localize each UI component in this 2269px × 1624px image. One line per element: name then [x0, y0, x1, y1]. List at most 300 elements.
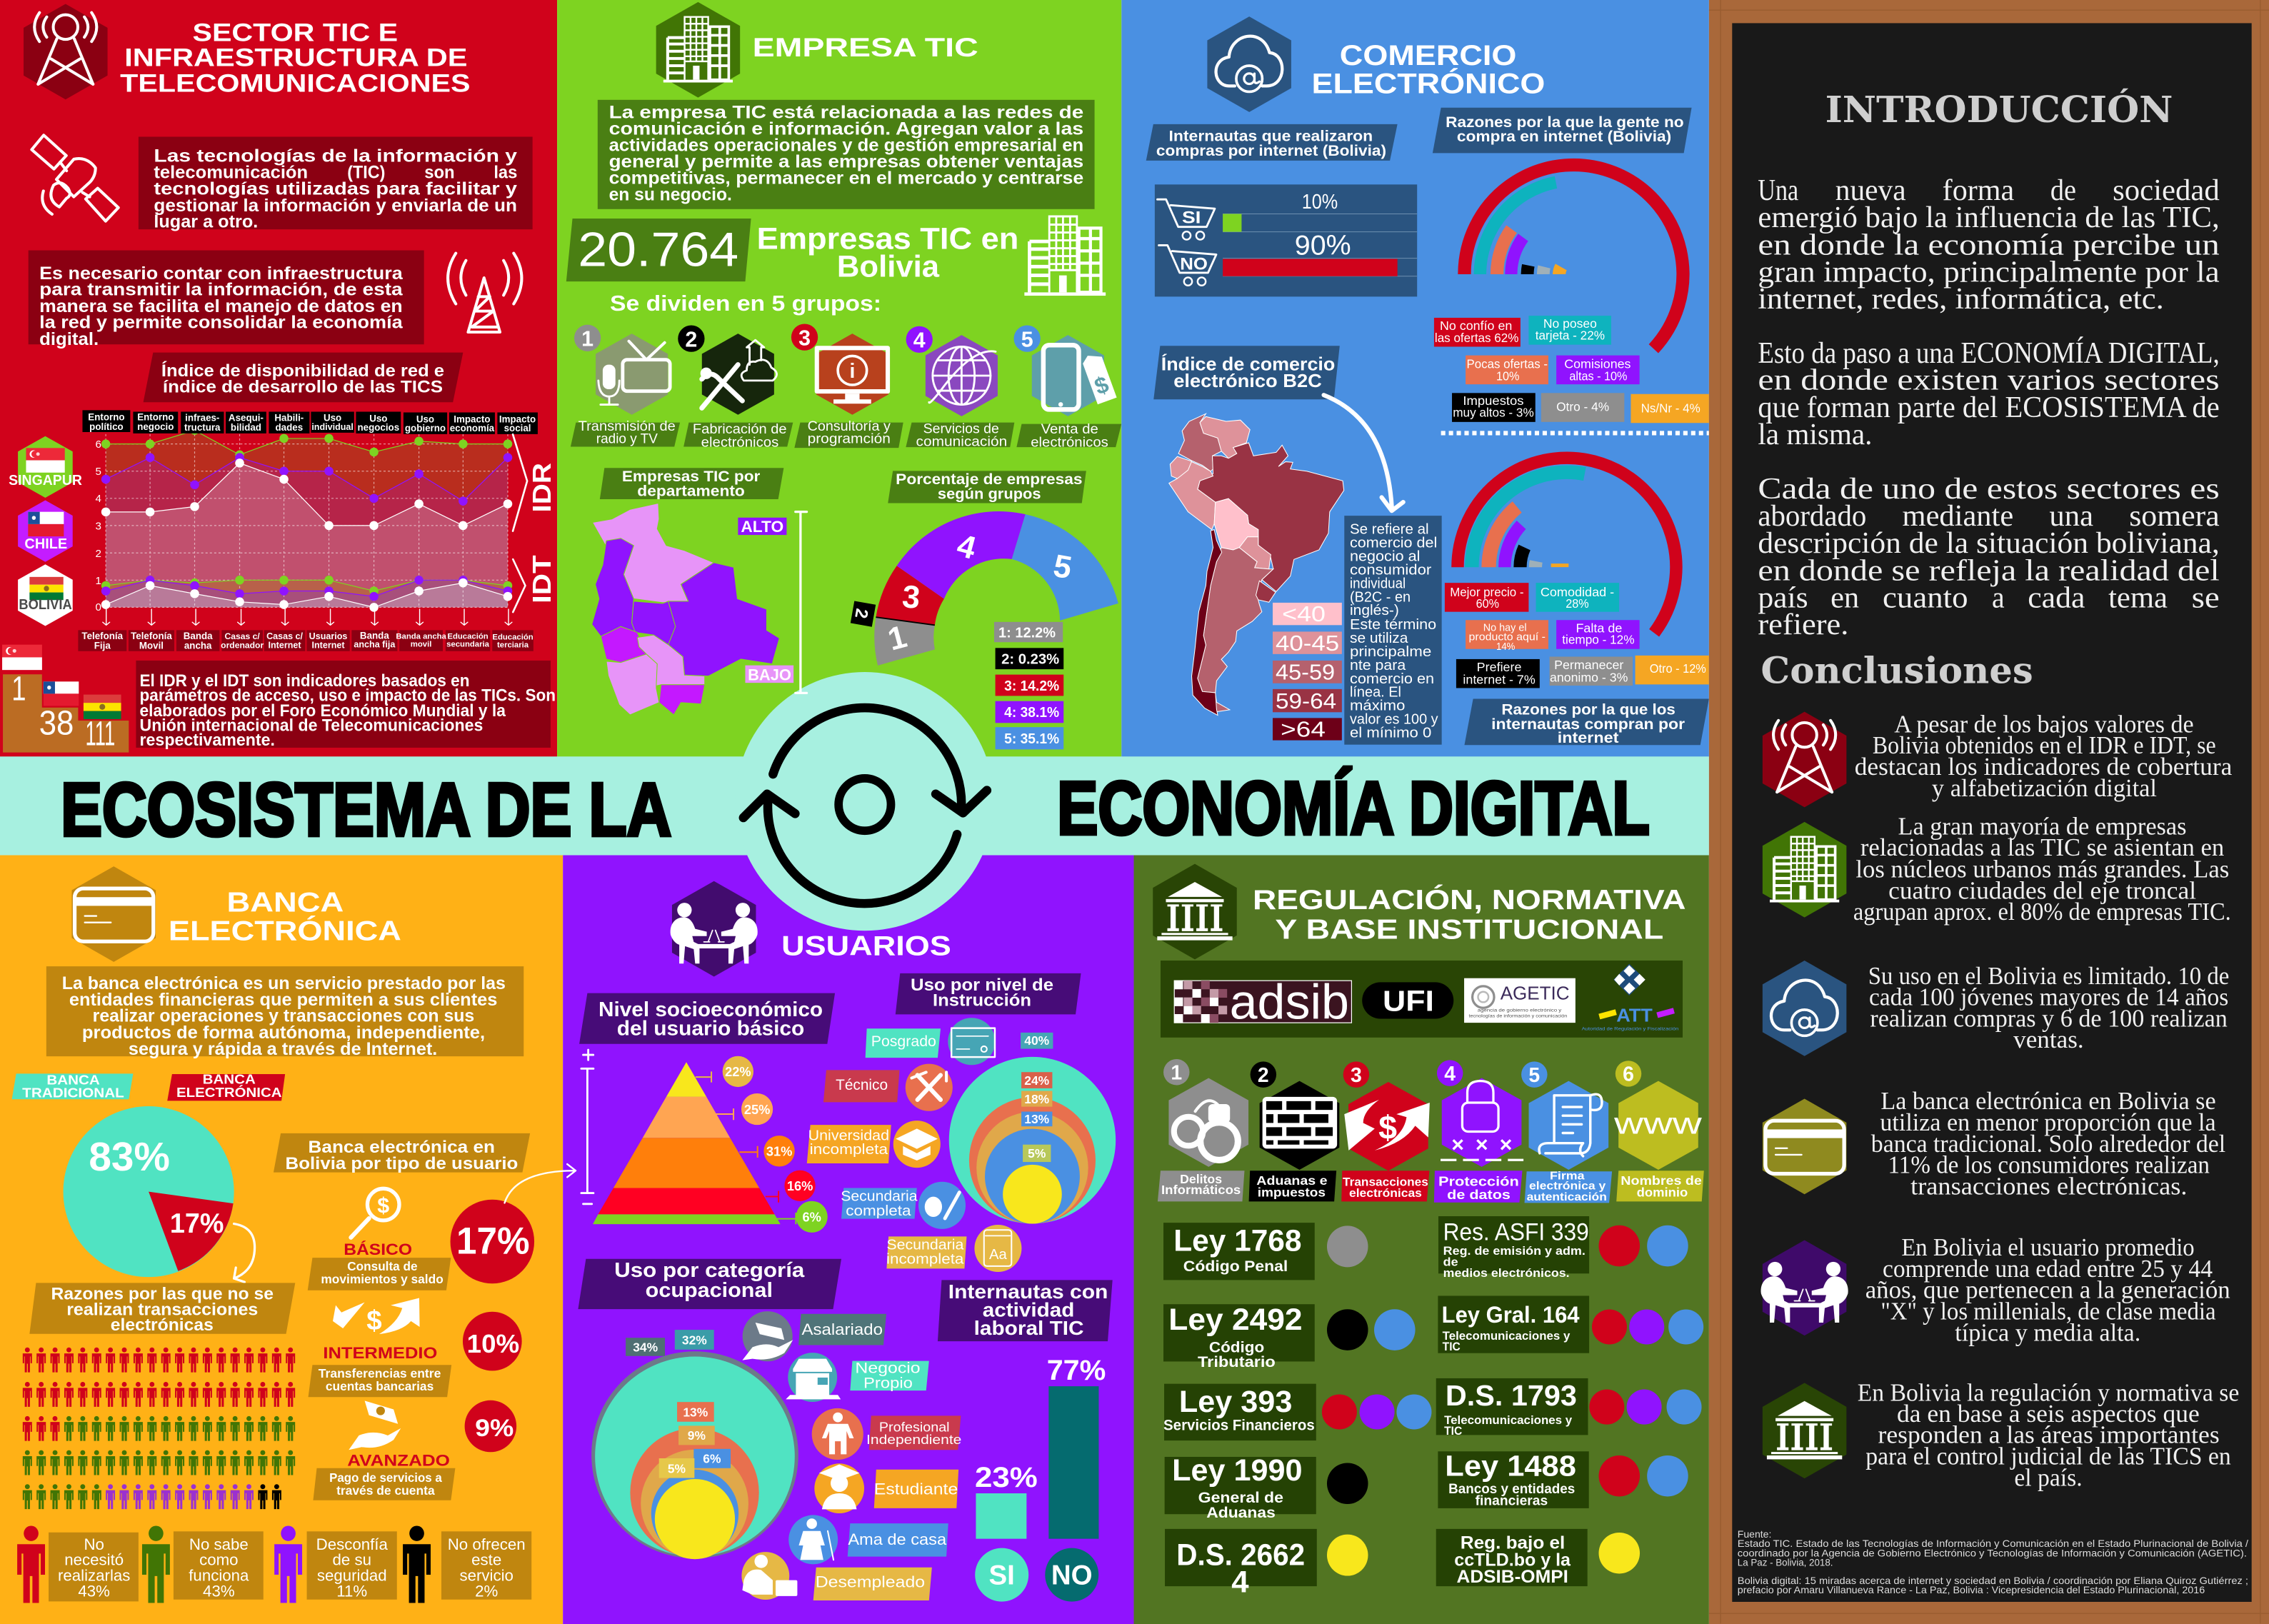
legend: razones compran: 14% — [1496, 641, 1515, 653]
heading: razones no transacciones: electrónicas — [111, 1315, 214, 1335]
labels: chart bottom categories: movil — [411, 641, 431, 649]
law area 3: transacciones: $ — [1378, 1109, 1397, 1146]
group 3: consultoría: i — [849, 360, 855, 383]
heading: sector TIC: TELECOMUNICACIONES — [120, 69, 470, 97]
heading: uso por instrucción: Uso por nivel de — [911, 976, 1053, 995]
heading: internautas compras — [1146, 124, 1398, 161]
text block: introducción párrafo 3: en donde se refleja la realidad del — [1758, 554, 2220, 588]
donut chart: porcentaje por grupo: 5 — [1051, 548, 1074, 586]
item: universidad incompleta — [807, 1121, 941, 1168]
text block: fuentes: La Paz - Bolivia, 2018. — [1738, 1557, 1833, 1568]
text block: definición empresa TIC: La empresa TIC está relacionada a las redes de — [609, 103, 1083, 123]
logos: instituciones — [1161, 961, 1683, 1038]
nested circles: instrucción: 5% — [1028, 1146, 1046, 1161]
law: D.S. 1793: Telecomunicaciones y — [1444, 1414, 1572, 1427]
user level: intermedio: Transferencias entre — [319, 1366, 441, 1380]
user level: avanzado: Pago de servicios a — [329, 1470, 442, 1485]
labels: chart top categories: Uso — [324, 413, 341, 423]
line chart: IDR e IDT: 5 — [96, 466, 101, 478]
legend: banca electrónica: ELECTRÓNICA — [176, 1085, 281, 1100]
text block: definición empresa TIC: actividades operacionales y de gestión empresarial en — [609, 136, 1083, 156]
icon: cloud hexagon — [1207, 16, 1291, 112]
labels: chart bottom categories: Internet — [269, 640, 301, 650]
text block: introducción párrafo 3: país — [1758, 581, 1808, 614]
text block: definición B2C: principalme — [1350, 644, 1431, 660]
law area 4: protección de datos: de datos — [1447, 1187, 1511, 1202]
title band: ecosistema de la economía digital — [0, 672, 1709, 931]
text block: tecnologías de la información: gestionar la información y enviarla de un — [154, 196, 517, 216]
law: D.S. 26624: D.S. 2662 — [1176, 1538, 1305, 1572]
text block: fuentes: Bolivia digital: 15 miradas acerca de internet y sociedad en Bolivia / coordinación por Eliana Quiroz Gutiérrez ; — [1738, 1575, 2248, 1586]
heading: razones no transacciones: realizan transacciones — [66, 1300, 258, 1319]
text block: introducción párrafo 1: gran impacto, principalmente por la — [1758, 255, 2220, 289]
logos: instituciones: tecnologías de información y comunicación — [1469, 1014, 1567, 1018]
line chart: IDR e IDT: 0 — [96, 601, 101, 613]
legend: no sabe: funciona — [189, 1566, 249, 1584]
labels: chart bottom categories — [78, 630, 534, 651]
law: Ley 1488: financieras — [1476, 1493, 1548, 1509]
pyramid chart: nivel socioeconómico: 25% — [744, 1102, 770, 1117]
panel: empresa TIC — [557, 0, 1121, 757]
heading: razones no transacciones — [29, 1283, 295, 1335]
heading: nivel socioeconómico: del usuario básico — [617, 1017, 804, 1040]
law area 3: transacciones: 3 — [1351, 1064, 1362, 1087]
legend: razones no compra: 10% — [1496, 369, 1519, 383]
group 2: fabricación — [678, 325, 793, 450]
text block: introducción párrafo 2: en donde existen varios sectores — [1758, 364, 2220, 397]
law: Ley 1488: Bancos y entidades — [1448, 1481, 1575, 1497]
law area 4: protección de datos: 4 — [1444, 1063, 1456, 1086]
item: técnico — [823, 1064, 953, 1111]
panel: usuarios — [505, 855, 1133, 1624]
law: Res. ASFI 339 — [1438, 1216, 1688, 1280]
nested circles: ocupación — [591, 1330, 798, 1559]
law area 6: nombres de dominio: dominio — [1637, 1186, 1688, 1200]
heading: razones compran: Razones por la que los — [1501, 702, 1676, 718]
law: ccTLD.bo: ccTLD.bo y la — [1454, 1550, 1571, 1570]
text block: infraestructura: Es necesario contar con infraestructura — [39, 264, 404, 284]
conclusion 6: En Bolivia la regulación y normativa se — [1858, 1379, 2239, 1406]
conclusion 1 — [1763, 711, 2232, 807]
law area 4: protección de datos — [1434, 1060, 1523, 1203]
text block: introducción párrafo 3 — [1758, 472, 2220, 641]
bar chart: compras SI y NO: 90% — [1295, 230, 1351, 261]
arrow: banca a pirámide — [505, 1164, 576, 1203]
user level: básico: $ — [377, 1193, 389, 1218]
text block: introducción párrafo 1: Una — [1758, 174, 1798, 207]
text block: definición banca: entidades financieras que permiten a sus clientes — [69, 990, 497, 1010]
item: técnico: Técnico — [836, 1076, 888, 1093]
legend: razones compran — [1445, 583, 1709, 688]
legend: porcentajes: 3: 14.2% — [1004, 678, 1059, 694]
law: Ley 1768: Ley 1768 — [1173, 1223, 1302, 1258]
law: Ley 1488: Ley 1488 — [1445, 1450, 1576, 1483]
item: universidad incompleta: incompleta — [810, 1142, 888, 1158]
text block: definición B2C: nte para — [1350, 658, 1406, 673]
pictogram: personas por razón — [23, 1348, 295, 1509]
map scale: alto y bajo — [738, 512, 807, 693]
group 5: venta — [1014, 325, 1121, 450]
heading: banca electrónica — [169, 888, 401, 947]
text block: infraestructura: para transmitir la información, de esta — [39, 280, 404, 300]
legend: no necesitó: realizarlas — [58, 1566, 130, 1584]
law: Ley 393: Ley 393 — [1179, 1385, 1292, 1419]
legend: no ofrecen: 2% — [475, 1583, 498, 1600]
map scale: alto y bajo: ALTO — [741, 518, 783, 536]
legend: no ofrecen: No ofrecen — [448, 1535, 526, 1553]
heading: nivel socioeconómico: Nivel socioeconómico — [598, 998, 823, 1021]
labels: chart top categories: Uso — [369, 413, 387, 424]
law area 1: delitos: 1 — [1171, 1062, 1182, 1085]
group 1: radio y TV — [571, 325, 680, 447]
percent: 17%: 17% — [456, 1220, 530, 1263]
line chart: IDR e IDT: 3 — [96, 521, 101, 533]
text block: definición B2C: se utiliza — [1350, 631, 1408, 646]
percent: 9% — [465, 1400, 516, 1452]
law area 5: firma electrónica: 5 — [1528, 1064, 1540, 1087]
legend: no ofrecen: servicio — [459, 1566, 514, 1584]
text block: definición B2C: consumidor — [1350, 562, 1432, 578]
heading: regulación: Y BASE INSTITUCIONAL — [1275, 914, 1663, 945]
legend: no necesitó: 43% — [78, 1583, 110, 1600]
item: asalariado — [742, 1311, 886, 1361]
text block: definición banca: La banca electrónica es un servicio prestado por las — [62, 973, 506, 993]
heading: internautas compras: Internautas que realizaron — [1169, 128, 1373, 144]
text block: infraestructura: digital. — [39, 329, 99, 349]
percent: 17% — [451, 1200, 534, 1283]
law area 5: firma electrónica: Firma — [1550, 1170, 1585, 1182]
text block: introducción párrafo 1: emergió bajo la influencia de las TIC, — [1758, 201, 2220, 234]
logos: instituciones: adsib — [1230, 974, 1349, 1029]
law area 1: delitos: Informáticos — [1161, 1183, 1241, 1197]
group 1: radio y TV: Transmisión de — [578, 419, 676, 434]
heading: porcentaje de empresas: según grupos — [938, 486, 1041, 502]
item: secundaria completa: Secundaria — [841, 1189, 918, 1205]
labels: chart bottom categories: Telefonía — [81, 631, 124, 641]
text block: introducción párrafo 3: tema — [2108, 581, 2168, 614]
law: Ley General 164: TIC — [1443, 1340, 1461, 1353]
item: secundaria incompleta: incompleta — [886, 1251, 964, 1267]
labels: chart bottom categories: Casas c/ — [225, 631, 260, 641]
group 5: venta: Venta de — [1041, 422, 1098, 437]
legend: razones compran: Comodidad - — [1541, 585, 1614, 599]
legend: razones compran: No hay el — [1483, 621, 1527, 633]
law: Ley 1990: Ley 1990 — [1172, 1453, 1303, 1488]
item: ama de casa: Ama de casa — [848, 1530, 947, 1548]
pie chart: 83% y 17%: 17% — [170, 1208, 224, 1239]
item: secundaria completa — [841, 1182, 966, 1229]
text block: tecnologías de la información: lugar a otro. — [154, 212, 258, 232]
group 4: servicios — [906, 326, 1014, 450]
law area 1: delitos: Delitos — [1180, 1172, 1222, 1186]
group 5: venta: electrónicos — [1031, 435, 1108, 450]
law area 5: firma electrónica: autenticación — [1527, 1191, 1607, 1203]
legend: banca tradicional: TRADICIONAL — [22, 1085, 124, 1100]
text block: introducción párrafo 1: forma — [1943, 174, 2014, 207]
conclusion 5: En Bolivia el usuario promedio — [1901, 1234, 2195, 1261]
country badge: Chile: CHILE — [24, 536, 67, 552]
conclusion 3: realizan compras y 6 de 100 realizan — [1870, 1005, 2228, 1032]
bar chart: compras SI y NO: 10% — [1302, 191, 1338, 214]
heading: regulación — [1253, 884, 1686, 945]
legend: porcentajes: 4: 38.1% — [1004, 705, 1059, 721]
legend: razones no compra: Otro - 4% — [1556, 399, 1609, 413]
labels: chart bottom categories: Usuarios — [309, 631, 347, 641]
law area 2: aduanas: 2 — [1258, 1064, 1269, 1087]
heading: índice de disponibilidad — [144, 353, 463, 402]
podium ranking: 38 — [39, 703, 74, 742]
text block: definición banca — [46, 966, 524, 1059]
law: ccTLD.bo: Reg. bajo el — [1461, 1533, 1565, 1553]
legend: razones compran: 28% — [1566, 596, 1589, 611]
legend: razones no compra: tarjeta - 22% — [1536, 329, 1605, 343]
bar chart: compras SI y NO: NO — [1180, 254, 1208, 274]
logos: instituciones: AGETIC — [1501, 982, 1570, 1003]
item: desempleado: Desempleado — [816, 1573, 925, 1591]
legend: porcentajes: 1: 12.2% — [998, 626, 1056, 641]
legend: razones no compra: Pocas ofertas - — [1467, 357, 1548, 371]
heading: tipo de usuario — [274, 1133, 530, 1173]
heading: internautas laboral: actividad — [983, 1298, 1074, 1320]
labels: chart top categories — [82, 410, 538, 434]
text block: IDR e IDT: respectivamente. — [140, 731, 275, 750]
heading: introducción: INTRODUCCIÓN — [1825, 88, 2173, 131]
user level: avanzado: través de cuenta — [336, 1483, 435, 1498]
legend: no ofrecen — [403, 1525, 531, 1603]
labels: chart bottom categories: Educación — [447, 633, 489, 641]
heading: razones no compra: compra en internet (Bolivia) — [1457, 129, 1671, 145]
legend: razones no compra: las ofertas 62% — [1435, 331, 1518, 345]
text block: fuentes: Fuente: — [1738, 1529, 1771, 1540]
conclusion 2: cuatro ciudades del eje troncal — [1888, 877, 2196, 904]
conclusion 6: para el control judicial de las TICS en — [1865, 1443, 2231, 1470]
labels: chart top categories: dades — [276, 422, 303, 433]
heading: empresas por departamento: Empresas TIC por — [622, 468, 760, 485]
nested circles: instrucción: 24% — [1024, 1073, 1050, 1088]
law: D.S. 26624 — [1165, 1529, 1368, 1599]
title left: ECOSISTEMA DE LA — [61, 768, 671, 852]
icon: users hexagon — [671, 881, 758, 976]
legend: porcentajes: 5: 35.1% — [1004, 731, 1059, 747]
law: Ley 2492: Tributario — [1198, 1353, 1276, 1370]
percent: 9%: 9% — [475, 1415, 514, 1442]
line chart: IDR e IDT: 6 — [96, 438, 101, 451]
user level: básico: Consulta de — [347, 1259, 418, 1273]
stat: 20.764 empresas: 20.764 — [578, 224, 738, 277]
conclusion 5 — [1761, 1234, 2230, 1346]
law: Res. ASFI 339: de — [1443, 1255, 1458, 1268]
heading: razones no compra — [1433, 108, 1692, 153]
item: profesional independiente — [812, 1408, 961, 1460]
pie chart: 83% y 17% — [64, 1106, 234, 1277]
heading: internautas laboral: laboral TIC — [974, 1317, 1084, 1339]
heading: índice comercio B2C: electrónico B2C — [1173, 370, 1322, 391]
IDR and IDT brackets — [513, 434, 556, 612]
text block: introducción párrafo 3: Cada de uno de estos sectores es — [1758, 472, 2220, 506]
item: negocio propio — [786, 1353, 929, 1402]
user level: básico: movimientos y saldo — [321, 1272, 444, 1286]
legend: banca electrónica — [167, 1072, 285, 1101]
text block: introducción párrafo 1: nueva — [1835, 174, 1906, 207]
law: Res. ASFI 339: medios electrónicos. — [1443, 1266, 1570, 1280]
heading: índice de disponibilidad: índice de desarrollo de las TICS — [163, 378, 443, 397]
text block: definición empresa TIC — [598, 100, 1095, 209]
text block: fuentes: coordinado por la Agencia de Gobierno Electrónico y Tecnologías de Información y Comunicación (AGETIC). — [1738, 1548, 2247, 1558]
text block: IDR e IDT: elaborados por el Foro Económico Mundial y la — [140, 702, 506, 721]
group 2: fabricación: Fabricación de — [693, 422, 787, 437]
icon: building hexagon — [656, 2, 740, 98]
legend: desconfía: 11% — [336, 1583, 367, 1600]
nested circles: ocupación: 5% — [668, 1462, 686, 1476]
bar chart: actividad laboral TIC: 77% — [1047, 1355, 1106, 1386]
heading: tipo de usuario: Bolivia por tipo de usuario — [286, 1154, 518, 1173]
text block: definición banca: segura y rápida a través de Internet. — [129, 1039, 437, 1059]
law: Ley 1990: Aduanas — [1206, 1504, 1276, 1521]
law: Ley 393 — [1163, 1384, 1431, 1440]
law area 5: firma electrónica: electrónica y — [1529, 1181, 1606, 1193]
subheading: grupos: Se dividen en 5 grupos: — [610, 291, 881, 316]
pyramid chart: nivel socioeconómico: 22% — [725, 1064, 751, 1079]
law area 6: nombres de dominio: www — [1613, 1107, 1702, 1141]
panel: comercio electrónico — [1121, 0, 1709, 757]
labels: chart top categories: social — [504, 423, 531, 433]
heading: internautas laboral — [938, 1280, 1113, 1341]
nested circles: ocupación: 9% — [688, 1428, 706, 1443]
legend: banca tradicional: BANCA — [46, 1072, 100, 1087]
labels: chart top categories: Entorno — [88, 412, 125, 423]
law area 6: nombres de dominio — [1613, 1061, 1704, 1201]
icon: tower hexagon — [24, 4, 108, 99]
text block: definición B2C: Este término — [1350, 617, 1436, 633]
labels: chart bottom categories: secundaria — [446, 641, 490, 649]
labels: chart top categories: político — [89, 421, 124, 432]
legend: desconfía: de su — [333, 1550, 371, 1568]
group 3: consultoría: Consultoría y — [808, 419, 891, 434]
heading: usuarios: USUARIOS — [781, 931, 951, 961]
logos: instituciones: ATT — [1616, 1004, 1653, 1026]
heading: banca electrónica: ELECTRÓNICA — [169, 916, 401, 947]
labels: chart bottom categories: Banda ancha — [396, 633, 447, 641]
legend: índice B2C: 59-64 — [1276, 689, 1336, 713]
pyramid chart: nivel socioeconómico: 6% — [802, 1210, 821, 1225]
law area 3: transacciones: electrónicas — [1349, 1186, 1422, 1200]
user level: avanzado — [313, 1400, 455, 1500]
nested circles: instrucción: 18% — [1024, 1092, 1050, 1106]
item: secundaria incompleta: Aa — [989, 1247, 1008, 1263]
conclusion 3 — [1763, 961, 2229, 1056]
text block: definición B2C: comercio del — [1350, 536, 1437, 551]
percent: 10%: 10% — [467, 1329, 519, 1358]
stat: 20.764 empresas: Bolivia — [837, 249, 939, 284]
law: Ley General 164 — [1438, 1295, 1703, 1353]
text block: infraestructura: la red y permite consolidar la economía — [39, 313, 404, 333]
conclusion 4: banca tradicional. Solo alrededor del — [1871, 1131, 2225, 1158]
text block: definición empresa TIC: general y permite a las empresas obtener ventajas — [609, 152, 1083, 172]
conclusion 4: transacciones electrónicas. — [1910, 1173, 2188, 1200]
heading: tipo de usuario: Banca electrónica en — [309, 1138, 495, 1157]
item: profesional independiente: Independiente — [866, 1432, 961, 1447]
law area 4: protección de datos: Protección — [1438, 1173, 1519, 1188]
law: Ley 2492: Código — [1209, 1338, 1264, 1355]
donut chart: porcentaje por grupo: 2 — [851, 607, 871, 620]
pyramid chart: nivel socioeconómico: 16% — [787, 1178, 813, 1193]
text block: infraestructura: manera se facilita el manejo de datos en — [39, 296, 403, 316]
legend: índice B2C: >64 — [1281, 717, 1326, 741]
podium ranking: 111 — [86, 714, 115, 753]
conclusion 2: agrupan aprox. el 80% de empresas TIC. — [1853, 898, 2231, 926]
law: Ley 1990: General de — [1198, 1489, 1283, 1506]
law: Ley General 164: Ley Gral. 164 — [1442, 1302, 1580, 1328]
heading: índice comercio B2C — [1153, 346, 1340, 399]
heading: índice de disponibilidad: Índice de disponibilidad de red e — [161, 361, 444, 381]
heading: comercio electrónico: COMERCIO — [1340, 40, 1516, 71]
heading: razones compran: internet — [1558, 730, 1618, 746]
heading: porcentaje de empresas: Porcentaje de empresas — [896, 471, 1083, 488]
law area 2: aduanas: Aduanas e — [1256, 1173, 1328, 1188]
scale: plus minus — [581, 1050, 593, 1204]
percent: 10% — [463, 1312, 522, 1370]
podium ranking: 1 — [11, 670, 26, 708]
panel: pizarra introducción y conclusiones — [1709, 0, 2269, 1624]
pie chart: 83% y 17%: 83% — [89, 1135, 170, 1180]
text block: definición banca: productos de forma autónoma, independiente, — [82, 1023, 485, 1043]
panel: banca electrónica — [0, 855, 563, 1624]
labels: chart bottom categories: Banda — [360, 631, 389, 641]
icon: cycle arrows — [743, 708, 987, 903]
law: Ley General 164: Telecomunicaciones y — [1443, 1330, 1570, 1343]
radial chart: razones no compra — [1464, 165, 1683, 349]
labels: chart bottom categories: ordenador — [221, 640, 264, 650]
legend: no necesitó: necesitó — [64, 1550, 124, 1568]
heading: uso por instrucción: Instrucción — [933, 991, 1031, 1011]
conclusion 6 — [1763, 1379, 2239, 1491]
heading: comercio electrónico — [1312, 40, 1545, 99]
conclusion 3: ventas. — [2013, 1026, 2084, 1053]
text block: introducción párrafo 1 — [1758, 174, 2220, 316]
text block: tecnologías de la información: son — [424, 162, 455, 182]
text block: tecnologías de la información: telecomunicación — [154, 162, 308, 182]
law: Ley 1990 — [1165, 1453, 1368, 1521]
conclusion 1: y alfabetización digital — [1932, 775, 2157, 802]
heading: razones compran: internautas compran por — [1491, 716, 1685, 733]
text block: introducción párrafo 1: de — [2050, 174, 2076, 207]
heading: índice comercio B2C: Índice de comercio — [1161, 354, 1335, 375]
law area 4: protección de datos: ××× — [1451, 1133, 1512, 1157]
law: Res. ASFI 339: Reg. de emisión y adm. — [1443, 1244, 1586, 1258]
text block: IDR e IDT: parámetros de acceso, uso e impacto de las TICs. Son — [140, 687, 556, 706]
legend: desconfía — [274, 1525, 397, 1603]
labels: chart top categories: Uso — [416, 414, 434, 425]
labels: chart top categories: negocios — [358, 422, 399, 433]
panel: sector TIC e infraestructura — [0, 0, 557, 757]
conclusion 6: el país. — [2014, 1464, 2083, 1491]
group 4: servicios: 4 — [913, 329, 926, 353]
labels: chart top categories: Habili- — [274, 413, 304, 423]
law area 3: transacciones — [1341, 1061, 1430, 1201]
labels: chart top categories: Impacto — [454, 414, 491, 425]
text block: fuentes — [1738, 1529, 2248, 1595]
nested circles: ocupación: 32% — [682, 1333, 707, 1347]
text block: definición B2C: máximo — [1350, 698, 1405, 714]
text block: introducción párrafo 3: cuanto — [1883, 581, 1968, 614]
icon: building white — [1024, 216, 1106, 296]
law: Ley 1768: Código Penal — [1183, 1258, 1288, 1275]
law: D.S. 1793: TIC — [1444, 1425, 1463, 1438]
user level: básico — [308, 1188, 451, 1290]
bar chart: actividad laboral TIC: SI — [989, 1560, 1015, 1591]
group 1: radio y TV: 1 — [581, 327, 593, 351]
text block: introducción párrafo 3: se — [2192, 581, 2220, 614]
